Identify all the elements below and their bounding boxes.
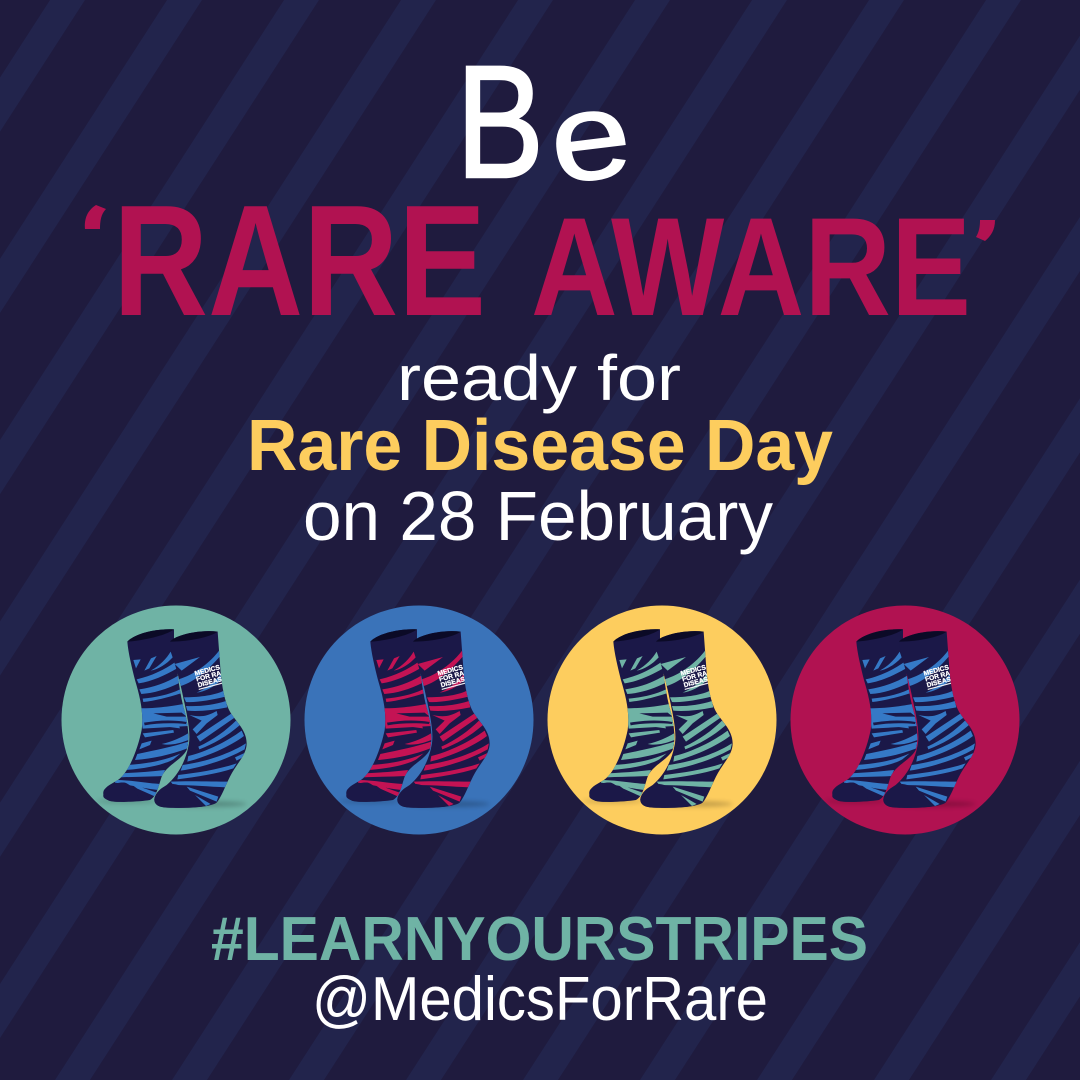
subtitle: Rare Disease Day: Rare Disease Day xyxy=(247,406,833,486)
hashtag: #LEARNYOURSTRIPES xyxy=(211,905,868,974)
sock badge: crimson xyxy=(790,606,1020,834)
sock logo: MEDICS xyxy=(923,664,950,678)
closing quote xyxy=(976,220,995,241)
socks illustration: blue stripes xyxy=(97,629,247,808)
title: Be: e xyxy=(542,64,638,210)
word: AWARE: AWARE xyxy=(531,188,971,345)
sock logo: MEDICS xyxy=(680,664,707,678)
sock logo: DISEASES xyxy=(197,674,232,689)
title: RARE AWARE xyxy=(85,173,995,349)
sock logo: FOR RARE xyxy=(681,668,717,684)
opening quote xyxy=(85,205,106,229)
sock logo: MEDICS xyxy=(194,664,221,678)
sock badge: yellow xyxy=(548,606,776,834)
sock logo xyxy=(194,664,222,690)
sock logo: FOR RARE xyxy=(438,668,474,684)
sock logo xyxy=(437,664,465,690)
sock logo: FOR RARE xyxy=(195,668,231,684)
sock logo: MEDICS xyxy=(437,664,464,678)
handle: @MedicsForRare xyxy=(312,965,768,1034)
sock logo: FOR RARE xyxy=(924,668,960,684)
sock badge: blue xyxy=(304,606,534,834)
socks illustration: green stripes xyxy=(583,629,733,808)
sock badge: green xyxy=(62,606,290,834)
sock logo xyxy=(680,664,708,690)
title: Be: B xyxy=(456,32,544,211)
socks illustration: pink stripes xyxy=(340,629,490,808)
socks illustration: blue stripes xyxy=(826,629,976,808)
sock logo: DISEASES xyxy=(926,674,961,689)
sock logo: DISEASES xyxy=(683,674,718,689)
sock logo xyxy=(923,664,951,690)
subtitle: on 28 February: on 28 February xyxy=(303,477,773,555)
word: RARE: RARE xyxy=(113,173,486,349)
title: Be xyxy=(456,32,638,211)
subtitle: ready for: ready for xyxy=(397,342,681,414)
sock logo: DISEASES xyxy=(440,674,475,689)
